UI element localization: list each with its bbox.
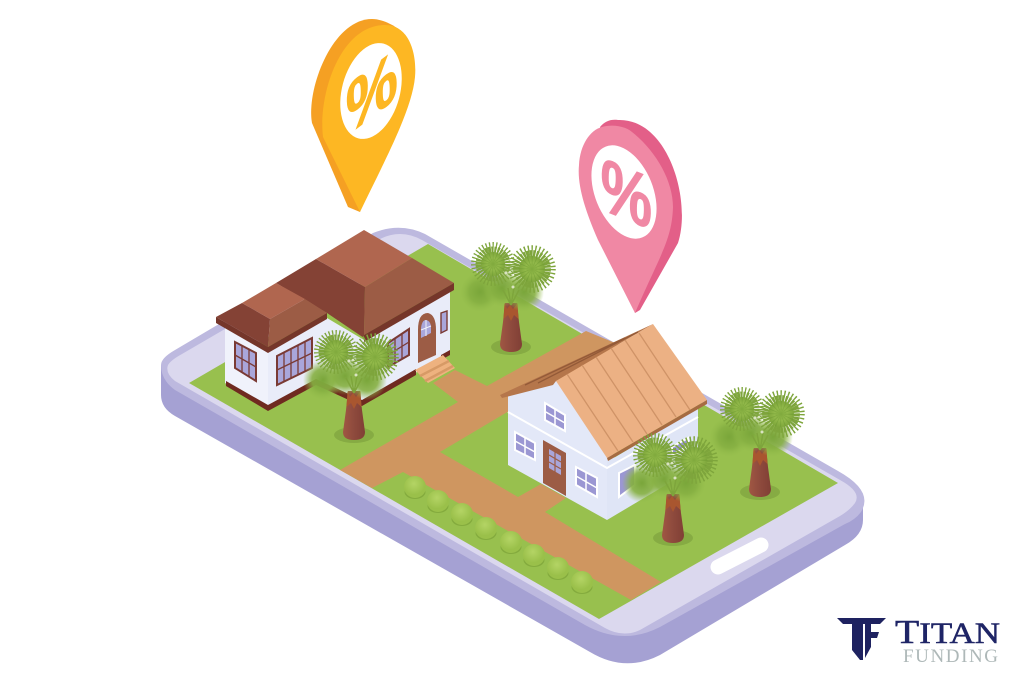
upper window [545,403,565,431]
small roof [216,283,327,353]
left wall [225,328,268,408]
pink percent pin [579,120,682,313]
pin front [579,126,673,313]
left house [216,230,455,411]
percent sign: % [600,142,653,246]
pin front [322,25,415,212]
roof [500,324,707,461]
small window [441,311,447,333]
phone side [161,365,863,663]
gable wall [508,378,615,520]
pin label circle [330,36,412,146]
lower left window [515,432,535,460]
wordmark: TITAN [895,614,1000,651]
palm tree behind left house [460,249,548,355]
lawn [189,244,838,619]
side windows [619,438,688,497]
palm tree front of left house [303,337,391,443]
home button [718,545,761,567]
yellow percent pin [311,19,415,212]
phone rim [161,228,864,636]
arched door [418,313,436,363]
logo: Titan Funding [837,614,1000,667]
steps [415,355,455,383]
shrubs [404,476,593,594]
pin label circle [579,136,669,248]
front wall [268,290,450,408]
phone screen surface [167,234,857,634]
side window [235,342,256,381]
pin side [600,120,682,313]
door [543,440,566,496]
phone [161,228,864,663]
palm tree front of right house [622,440,710,546]
percent sign: % [345,34,398,152]
tagline: FUNDING [903,646,998,667]
base trim [226,350,450,411]
front window [277,338,312,385]
side wall [607,408,698,520]
right house [500,324,707,520]
main roof [276,230,454,342]
dirt paths [340,331,661,600]
right window [388,329,409,367]
lower right window [576,467,597,497]
pin side [311,19,397,212]
logo mark [837,618,886,660]
palm tree right [709,394,797,500]
